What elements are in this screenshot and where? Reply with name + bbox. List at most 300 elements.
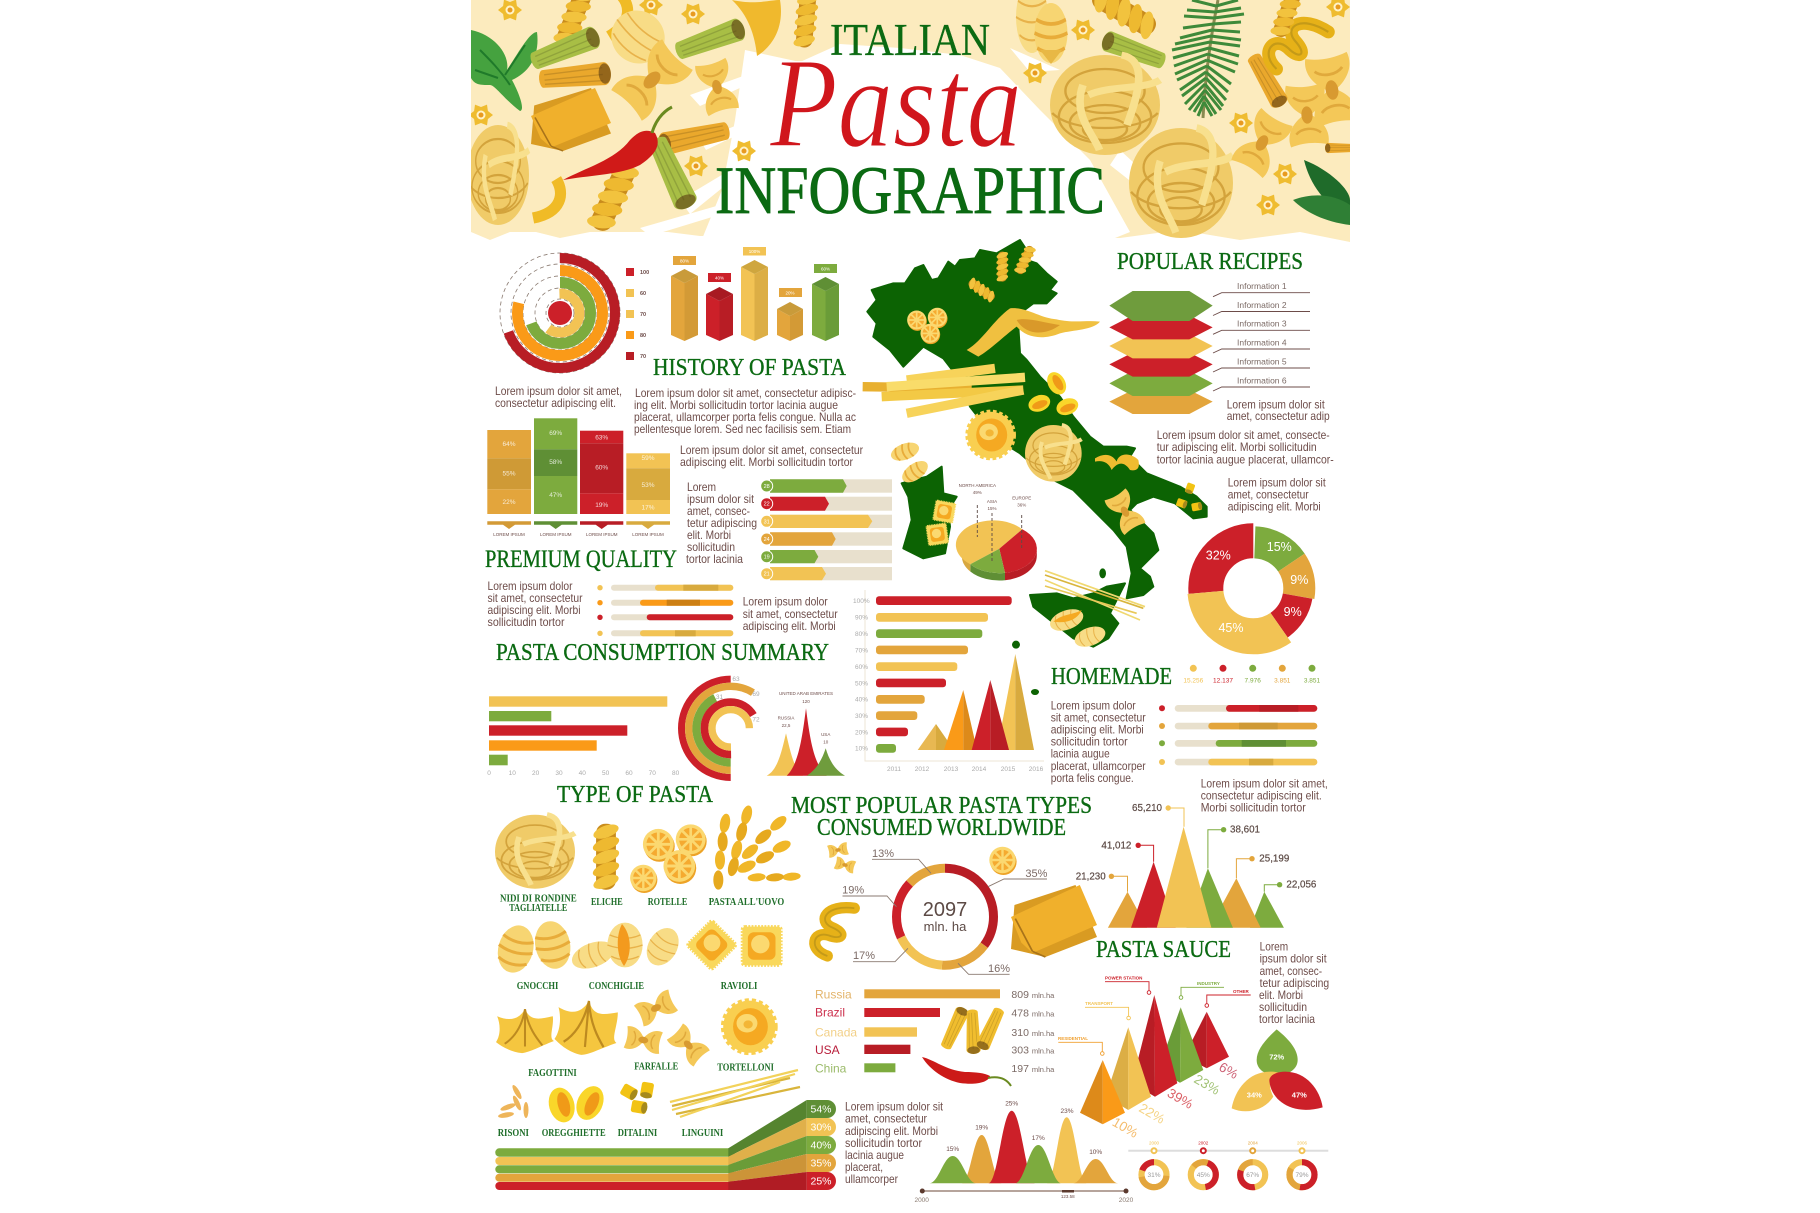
country values — [1011, 989, 1055, 1075]
pasta: ditalini: DITALINI — [618, 1128, 657, 1139]
text: second paragraph: adipiscing elit. Morbi sollicitudin tortor — [680, 455, 853, 469]
text: ribbon paragraph: amet, consectetur — [845, 1112, 927, 1126]
heading: most popular pasta types: MOST POPULAR PASTA TYPES — [791, 793, 1092, 819]
stacked bar values: 47% — [549, 492, 562, 499]
icon: bay leaves — [1293, 160, 1350, 225]
text: arrow bars paragraph: amet, consec- — [687, 504, 750, 518]
text: premium paragraph: adipiscing elit. Morbi — [488, 603, 580, 617]
year axis labels: 2011 — [887, 766, 901, 773]
peak chart: countries — [767, 691, 845, 776]
stacked bar values — [502, 430, 655, 512]
percent axis labels: 10% — [855, 746, 868, 753]
text: premium paragraph: sollicitudin tortor — [488, 615, 565, 629]
pasta: gnocchi: GNOCCHI — [517, 981, 558, 992]
percent axis labels: 20% — [855, 729, 868, 736]
donut years: 2004 — [1248, 1140, 1258, 1145]
bell values: 19% — [975, 1124, 988, 1132]
ribbon values: 40% — [810, 1140, 832, 1152]
text: mountain chart caption: Morbi sollicitudin tortor — [1201, 801, 1306, 815]
pasta: ditalini — [618, 1081, 657, 1139]
icon: rosemary sprig — [1172, 0, 1244, 118]
column labels: 80% — [680, 258, 689, 264]
column labels — [673, 247, 837, 297]
text: intro left: consectetur adipiscing elit. — [495, 396, 616, 410]
radial chart legend: 70 — [640, 354, 646, 360]
peak labels: 10 — [823, 740, 829, 744]
arrow progress bars: 21 — [764, 572, 770, 578]
consumption axis: 80 — [672, 770, 680, 777]
text: homemade paragraph: Lorem ipsum dolor — [1051, 698, 1136, 712]
timeline: 2020 — [1119, 1197, 1134, 1204]
pasta: nidi di rondine — [495, 815, 577, 914]
mountain values: 41,012 — [1101, 840, 1132, 851]
homemade legend: 12.137 — [1213, 678, 1233, 685]
ring leader lines and values: 19% — [842, 884, 864, 896]
text: ribbon paragraph: lacinia augue — [845, 1148, 904, 1162]
country values: 809 mln.ha — [1011, 989, 1055, 1001]
text: ribbon paragraph: Lorem ipsum dolor sit — [845, 1100, 944, 1114]
text: donut caption: adipiscing elit. Morbi — [1228, 500, 1321, 514]
text: donut caption — [1228, 476, 1326, 514]
pasta: all'uovo — [709, 804, 801, 908]
peak labels: 120 — [802, 699, 810, 704]
pyramid leaders — [1058, 982, 1251, 1055]
text: sauce paragraph: amet, consec- — [1260, 964, 1322, 978]
bell values: 23% — [1060, 1108, 1074, 1115]
text: arrow bars paragraph: tortor lacinia — [686, 552, 743, 566]
country values: 310 mln.ha — [1011, 1027, 1055, 1039]
arrow progress bars: 31 — [764, 519, 770, 525]
text: arrow bars paragraph — [686, 480, 757, 566]
consumption axis: 50 — [602, 770, 610, 777]
pasta: conchiglie: CONCHIGLIE — [589, 981, 644, 992]
radial chart legend: 60 — [640, 291, 646, 297]
header pasta left — [467, 0, 821, 239]
heading: homemade: HOMEMADE — [1051, 664, 1172, 690]
donut values: 9% — [1290, 573, 1308, 587]
consumption axis: 20 — [532, 770, 540, 777]
country bars — [815, 987, 1055, 1075]
title: ITALIAN: ITALIAN — [830, 15, 990, 65]
leaf values — [1247, 1052, 1307, 1100]
pasta: eliche: ELICHE — [591, 897, 623, 908]
pyramid leader labels: INDUSTRY — [1197, 981, 1220, 986]
heading: history of pasta: HISTORY OF PASTA — [653, 355, 847, 381]
pasta: linguini — [670, 1070, 800, 1139]
donut values: 45% — [1218, 621, 1244, 635]
ring values: 72 — [752, 716, 760, 724]
timeline — [914, 1188, 1134, 1204]
text: history paragraph: ing elit. Morbi sollicitudin tortor lacinia augue — [634, 398, 838, 412]
column labels: 40% — [715, 276, 724, 280]
arrow progress bars — [761, 479, 892, 580]
percent axis labels: 50% — [855, 680, 868, 687]
text: history paragraph: placerat, ullamcorper porta felis congue. Nulla ac — [634, 410, 856, 424]
percent axis labels: 40% — [855, 697, 868, 704]
text: recipes paragraph: Lorem ipsum dolor sit amet, consecte- — [1157, 428, 1330, 442]
text: mountain chart caption — [1201, 776, 1328, 815]
pyramid percentages: 10% — [1110, 1114, 1141, 1141]
text: ribbon paragraph: sollicitudin tortor — [845, 1136, 922, 1150]
peak labels — [778, 691, 833, 744]
text: arrow bars paragraph: elit. Morbi — [687, 528, 731, 542]
ribbon values: 35% — [810, 1158, 832, 1170]
radial chart legend: 100 — [640, 270, 649, 276]
ring values: 69 — [752, 691, 760, 698]
year axis labels: 2014 — [972, 766, 987, 773]
arrow progress bars: 28 — [764, 484, 770, 490]
text: ribbon paragraph: placerat, — [845, 1160, 883, 1174]
text: premium paragraph: sit amet, consectetur — [488, 591, 582, 605]
pyramid percentages — [1110, 1059, 1241, 1141]
peak labels: RUSSIA — [778, 716, 794, 720]
homemade legend: 15.256 — [1183, 678, 1204, 685]
text: homemade paragraph: sit amet, consectetur — [1051, 711, 1146, 725]
donut years: 2002 — [1198, 1140, 1209, 1145]
pasta: tortelloni: TORTELLONI — [717, 1063, 774, 1074]
leaf values: 72% — [1269, 1052, 1285, 1062]
stacked bar values: 55% — [502, 470, 516, 478]
stacked bar captions: LOREM IPSUM — [632, 532, 664, 537]
text: recipes caption — [1227, 397, 1330, 423]
stacked bar values: 63% — [595, 434, 608, 442]
3D pie chart — [956, 483, 1037, 580]
stacked bar captions: LOREM IPSUM — [586, 532, 618, 537]
ring values: 31 — [716, 694, 723, 701]
year axis labels — [887, 766, 1044, 773]
pyramid leader labels: OTHER — [1233, 989, 1250, 994]
pasta on the map — [863, 243, 1203, 651]
year axis labels: 2016 — [1029, 766, 1044, 773]
text: history paragraph: pellentesque lorem. Sed nec facilisis sem. Etiam — [634, 422, 851, 436]
recipe information labels — [1213, 281, 1310, 391]
percent axis labels: 80% — [855, 631, 868, 638]
ribbon values: 30% — [810, 1122, 832, 1134]
text: second paragraph: Lorem ipsum dolor sit amet, consectetur — [680, 443, 863, 457]
text: bar chart paragraph: Lorem ipsum dolor — [743, 595, 828, 609]
percent axis labels: 90% — [855, 614, 868, 622]
pasta: fagottini: FAGOTTINI — [528, 1068, 577, 1079]
stacked bar values: 64% — [502, 441, 516, 448]
pie labels: NORTH AMERICA — [959, 483, 996, 488]
heading: pasta sauce: PASTA SAUCE — [1096, 937, 1231, 963]
consumption bar chart — [487, 696, 680, 777]
pyramid percentages: 22% — [1136, 1100, 1167, 1127]
recipe information labels: Information 4 — [1237, 337, 1287, 347]
text: sauce paragraph: ipsum dolor sit — [1260, 952, 1327, 966]
year axis labels: 2013 — [944, 766, 959, 773]
bell values — [946, 1100, 1102, 1156]
map of Italy — [863, 240, 1207, 694]
bell values: 15% — [946, 1146, 959, 1153]
ring values: 63 — [732, 676, 740, 683]
consumption axis: 40 — [579, 770, 586, 777]
pasta catalogue — [493, 804, 801, 1139]
text: sauce paragraph: elit. Morbi — [1259, 988, 1303, 1002]
mountain values — [1076, 803, 1317, 891]
text: recipes caption: Lorem ipsum dolor sit — [1227, 397, 1325, 411]
pasta: tortelloni — [717, 1001, 775, 1074]
mountain values: 25,199 — [1259, 854, 1290, 865]
donut values: 15% — [1267, 540, 1292, 554]
text: recipes caption: amet, consectetur adip — [1227, 409, 1330, 423]
radial chart legend: 80 — [640, 333, 646, 339]
percent axis labels: 100% — [853, 598, 870, 605]
icon: red chili pepper — [563, 107, 672, 180]
arrow progress bars: 24 — [764, 537, 770, 543]
pie labels: 36% — [1017, 502, 1026, 508]
heading: pasta consumption summary: PASTA CONSUMPTION SUMMARY — [496, 640, 829, 666]
text: recipes paragraph — [1157, 428, 1334, 466]
text: history paragraph — [634, 386, 856, 436]
country values: 478 mln.ha — [1011, 1008, 1055, 1020]
stacked bar captions: LOREM IPSUM — [540, 532, 572, 537]
stacked bar chart — [487, 418, 670, 537]
timeline: 2000 — [914, 1197, 929, 1204]
stacked bar values: 19% — [595, 502, 608, 509]
percent axis labels: 30% — [855, 713, 868, 720]
text: arrow bars paragraph: Lorem — [687, 480, 716, 494]
small donut timeline — [1128, 1140, 1328, 1187]
donut percentages: 45% — [1197, 1172, 1210, 1179]
country names — [815, 987, 857, 1075]
country names: Russia — [815, 987, 852, 1001]
recipe information labels: Information 6 — [1237, 375, 1287, 385]
text: homemade paragraph: adipiscing elit. Morbi — [1051, 723, 1144, 737]
small donuts — [1142, 1162, 1314, 1187]
recipe information labels: Information 1 — [1237, 281, 1287, 291]
header pasta right — [1016, 0, 1360, 238]
donut percentages — [1147, 1172, 1309, 1179]
concentric half rings — [682, 676, 780, 778]
pasta: eliche — [591, 822, 623, 908]
text: ribbon paragraph: ullamcorper — [845, 1172, 898, 1186]
pasta: risoni — [498, 1084, 529, 1139]
bell values: 17% — [1032, 1135, 1045, 1142]
text: homemade paragraph: lacinia augue — [1051, 747, 1110, 761]
text: sauce paragraph: tortor lacinia — [1259, 1012, 1315, 1026]
stacked bar values: 53% — [641, 482, 655, 489]
ring values — [716, 676, 760, 724]
radial chart legend — [626, 268, 649, 360]
stacked bar values: 60% — [595, 464, 608, 472]
mountain leaders — [1111, 808, 1280, 892]
column labels: 60% — [821, 266, 830, 272]
pasta: farfalle — [624, 989, 710, 1072]
hexagon stack — [1109, 291, 1213, 414]
ring centre value — [923, 899, 967, 934]
recipe information labels: Information 3 — [1237, 319, 1287, 329]
peak labels: USA — [821, 732, 830, 737]
text: homemade paragraph — [1051, 698, 1146, 785]
text: intro left: Lorem ipsum dolor sit amet, — [495, 384, 622, 398]
leaf values: 47% — [1292, 1090, 1307, 1100]
homemade legend: 3.851 — [1274, 678, 1291, 685]
pasta around the ring — [812, 842, 1097, 1054]
consumption axis: 70 — [649, 770, 656, 777]
text: arrow bars paragraph: tetur adipiscing — [687, 516, 757, 530]
pasta: rotelle — [630, 824, 707, 908]
pasta: oregghiette — [542, 1082, 609, 1139]
text: second paragraph — [680, 443, 863, 469]
text: arrow bars paragraph: ipsum dolor sit — [687, 492, 755, 506]
slider bars: homemade — [1159, 705, 1317, 765]
pie labels: 15% — [987, 506, 997, 511]
icon: basil leaves — [471, 30, 538, 111]
radial chart legend: 70 — [640, 312, 646, 318]
pasta: fagottini — [496, 998, 620, 1079]
country names: China — [815, 1061, 847, 1075]
heading: type of pasta: TYPE OF PASTA — [557, 782, 714, 808]
pasta: risoni: RISONI — [498, 1128, 529, 1139]
ring leader lines and values: 17% — [853, 950, 875, 962]
triangle columns — [918, 654, 1034, 750]
ring chart 2097 — [842, 848, 1048, 975]
text: mountain chart caption: Lorem ipsum dolor sit amet, — [1201, 776, 1328, 790]
leaf chart — [1232, 1029, 1323, 1111]
pasta: farfalle: FARFALLE — [634, 1061, 679, 1072]
mountain values: 38,601 — [1230, 825, 1260, 836]
icon: chili pepper small — [922, 1057, 1011, 1086]
pyramid percentages: 6% — [1216, 1059, 1241, 1082]
ribbon values: 25% — [810, 1176, 832, 1188]
text: bar chart paragraph: sit amet, consectetur — [743, 607, 838, 621]
stacked bar values: 59% — [641, 455, 655, 462]
column labels: 100% — [749, 249, 760, 254]
text: homemade paragraph: placerat, ullamcorper — [1051, 759, 1146, 773]
donut percentages: 67% — [1246, 1172, 1259, 1179]
ribbon chart — [495, 1100, 836, 1190]
mountain chart — [1076, 803, 1317, 928]
text: recipes paragraph: tur adipiscing elit. Morbi sollicitudin — [1157, 440, 1317, 454]
ring leader lines and values: 16% — [988, 963, 1010, 975]
stacked bar captions — [487, 521, 670, 537]
pasta: oregghiette: OREGGHIETTE — [542, 1128, 606, 1139]
title: INFOGRAPHIC: INFOGRAPHIC — [715, 152, 1105, 228]
consumption axis: 0 — [487, 770, 491, 777]
stacked bar values: 69% — [549, 430, 562, 437]
stacked bar values: 58% — [549, 459, 562, 466]
mountain values: 65,210 — [1132, 803, 1162, 814]
pasta: nidi di rondine: NIDI DI RONDINE — [500, 894, 577, 905]
donut chart — [1205, 540, 1308, 636]
pasta: gnocchi — [493, 918, 575, 992]
pyramid percentages: 39% — [1165, 1085, 1196, 1112]
text: premium paragraph: Lorem ipsum dolor — [488, 579, 573, 593]
bell curve chart — [914, 1100, 1134, 1204]
pyramid leader labels — [1058, 976, 1250, 1041]
pasta: ravioli: RAVIOLI — [721, 981, 757, 992]
text: homemade paragraph: sollicitudin tortor — [1051, 735, 1128, 749]
country values: 197 mln.ha — [1011, 1063, 1055, 1075]
mountain values: 21,230 — [1076, 871, 1106, 882]
title: Pasta: Pasta — [769, 32, 1022, 174]
text: donut caption: amet, consectetur — [1228, 487, 1309, 501]
homemade legend: 7.976 — [1245, 678, 1261, 685]
text: sauce paragraph — [1259, 940, 1329, 1026]
country names: Canada — [815, 1026, 857, 1040]
radial chart — [500, 253, 649, 373]
leaf values: 34% — [1247, 1090, 1262, 1100]
recipe information labels: Information 5 — [1237, 356, 1287, 366]
pyramid leader labels: RESIDENTIAL — [1058, 1036, 1088, 1041]
text: ribbon paragraph — [845, 1100, 944, 1186]
text: recipes paragraph: tortor lacinia augue placerat, ullamcor- — [1157, 452, 1334, 466]
horizontal bar chart with years — [853, 590, 1044, 773]
timeline: 123.58 — [1061, 1194, 1075, 1199]
donut years: 2006 — [1297, 1140, 1308, 1145]
pasta: ravioli — [687, 920, 781, 992]
ring leader lines and values — [842, 848, 1048, 975]
text: donut caption: Lorem ipsum dolor sit — [1228, 476, 1326, 490]
3D column chart — [671, 247, 839, 341]
donut years — [1149, 1140, 1308, 1145]
text: sauce paragraph: Lorem — [1260, 940, 1288, 954]
pie labels: ASIA — [987, 499, 997, 504]
donut percentages: 31% — [1147, 1172, 1161, 1179]
consumption axis: 30 — [555, 770, 563, 777]
pie labels: 49% — [973, 490, 982, 495]
heading: popular recipes: POPULAR RECIPES — [1117, 249, 1303, 275]
text: ribbon paragraph: adipiscing elit. Morbi — [845, 1124, 938, 1138]
bell values: 10% — [1089, 1149, 1102, 1156]
text: sauce paragraph: sollicitudin — [1259, 1000, 1307, 1014]
ring leader lines and values: 13% — [872, 848, 894, 860]
peak labels: 22,5 — [782, 723, 791, 728]
consumption axis: 60 — [625, 770, 633, 777]
slider bars: premium — [597, 585, 733, 636]
heading: most popular pasta types — [791, 793, 1092, 841]
year axis labels: 2012 — [915, 766, 930, 773]
pyramid percentages: 23% — [1191, 1071, 1222, 1098]
stacked bar values: 22% — [502, 499, 516, 506]
text: premium paragraph — [488, 579, 582, 629]
text: arrow bars paragraph: sollicitudin — [687, 540, 735, 554]
percent axis labels — [853, 598, 870, 753]
donut values — [1206, 540, 1308, 635]
text: bar chart paragraph — [743, 595, 838, 633]
percent axis labels: 60% — [855, 664, 868, 671]
donut values: 9% — [1284, 605, 1302, 619]
homemade legend: 3.851 — [1304, 678, 1321, 685]
ring centre value: 2097 — [923, 899, 967, 921]
heading: most popular pasta types: CONSUMED WORLDWIDE — [817, 815, 1066, 841]
text: history paragraph: Lorem ipsum dolor sit amet, consectetur adipisc- — [635, 386, 856, 400]
pasta: all'uovo: PASTA ALL'UOVO — [709, 897, 784, 908]
text: homemade paragraph: porta felis congue. — [1051, 771, 1134, 785]
consumption axis: 10 — [509, 770, 516, 777]
column labels: 20% — [785, 290, 795, 296]
ribbon values — [810, 1104, 832, 1188]
arrow progress bars: 19 — [764, 555, 770, 561]
pyramid leader labels: TRANSPORT — [1085, 1001, 1113, 1006]
peak labels: UNITED ARAB EMIRATES — [779, 691, 833, 696]
pie labels — [959, 483, 1031, 511]
stacked bar values: 17% — [641, 504, 655, 512]
country names: USA — [815, 1043, 840, 1057]
bell values: 25% — [1005, 1100, 1018, 1108]
pie labels: EUROPE — [1012, 496, 1031, 500]
ring centre value: mln. ha — [924, 919, 967, 934]
homemade legend — [1183, 665, 1321, 685]
text: intro left — [495, 384, 622, 410]
heading: premium quality: PREMIUM QUALITY — [485, 546, 677, 573]
recipe information labels: Information 2 — [1237, 300, 1287, 310]
ribbon values: 54% — [810, 1104, 832, 1116]
year axis labels: 2015 — [1001, 766, 1016, 773]
3D pyramid chart — [1058, 976, 1251, 1141]
donut percentages: 79% — [1295, 1172, 1309, 1179]
